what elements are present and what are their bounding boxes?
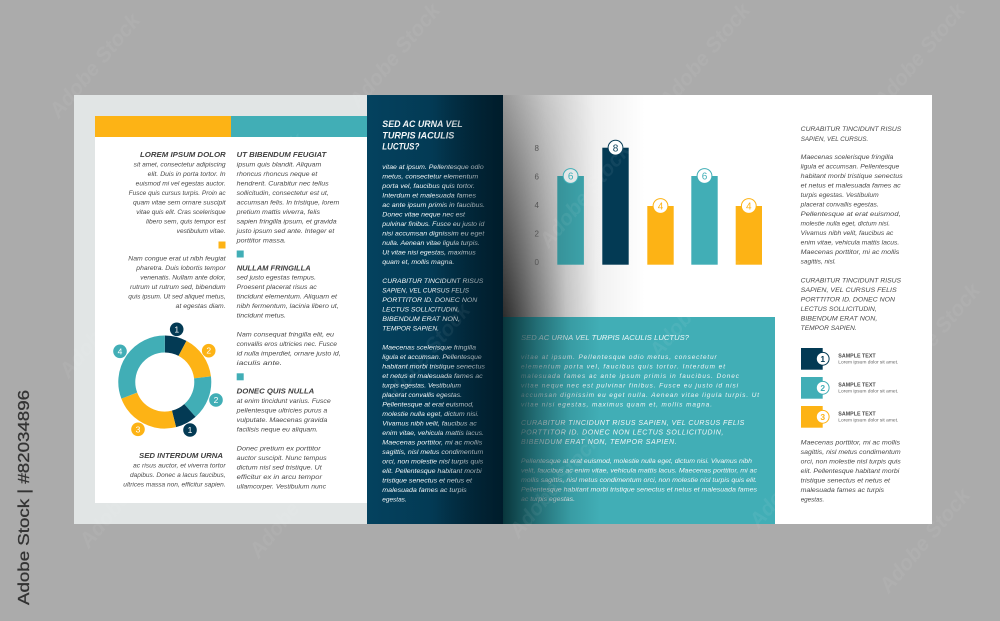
second column text: accumsan felis. In tristique, lorem <box>237 200 340 206</box>
right page <box>503 95 932 524</box>
watermark: Adobe Stock <box>244 448 346 563</box>
second column text: porttitor massa. <box>236 238 286 244</box>
orange square marker <box>218 242 226 248</box>
legend item 3: SAMPLE TEXT <box>838 412 876 418</box>
body text: BIBENDUM ERAT NON, TEMPOR SAPIEN. <box>521 439 677 446</box>
watermark: Adobe Stock <box>534 138 636 253</box>
body text: elit. Pellentesque habitant morbi <box>382 468 482 475</box>
second column text: vulputate. Maecenas gravida <box>237 417 328 424</box>
body text: Maecenas scelerisque fringilla <box>382 345 476 352</box>
badges: 2 <box>214 395 219 405</box>
watermark: Adobe Stock <box>54 268 156 383</box>
legend item 3 <box>801 406 898 428</box>
second column text: Proesent placerat risus ac <box>237 284 318 291</box>
second column text: Nam consequat fringilla elit, eu <box>237 332 334 339</box>
second column text: justo ipsum sed ante. Integer et <box>236 228 335 235</box>
body text: mollis sagittis, nisl metus condimentum orci, non molestie nisl turpis quis elit. <box>521 477 757 484</box>
body text: PORTTITOR ID. DONEC NON <box>382 297 478 304</box>
watermark: Adobe Stock <box>74 438 176 553</box>
right column text: habitant morbi tristique senectus <box>801 173 904 180</box>
segments <box>127 344 203 420</box>
left column text block 1: quam vitae sem ornare suscipit <box>133 200 226 206</box>
watermark: Adobe Stock <box>654 0 756 113</box>
bar value badges: 8 <box>613 143 619 154</box>
body text: porta vel, faucibus quis tortor. <box>381 183 475 190</box>
right column text: ligula et accumsan. Pellentesque <box>801 164 900 170</box>
body text: SAPIEN, VEL CURSUS FELIS <box>382 288 470 294</box>
watermark: Adobe Stock <box>209 128 311 243</box>
right column text <box>800 126 904 332</box>
left column text block 2: quis ipsum. Ut sed aliquet metus, <box>128 294 226 301</box>
left column text block 2 <box>128 256 227 310</box>
left column text block 2: Nam congue erat ut nibh feugiat <box>128 256 226 263</box>
left column text block 1: vestibulum vitae. <box>177 228 226 235</box>
right column text: Vivamus nibh velit, faucibus ac <box>801 230 894 237</box>
body text: enim vitae, vehicula mattis lacus. <box>382 430 484 437</box>
body text: vitae at ipsum. Pellentesque odio metus, consectetur <box>521 354 718 361</box>
left column text block 2: pharetra. Duis lobortis tempor <box>135 265 227 272</box>
donut caption <box>123 451 227 489</box>
second column text: NULLAM FRINGILLA <box>237 264 311 272</box>
bar chart <box>534 140 762 267</box>
body text: vitae at ipsum. Pellentesque odio <box>382 164 484 171</box>
body text: quam et, mollis magna. <box>382 259 454 266</box>
body text: metus, consectetur elementum <box>382 174 479 180</box>
heading: SED AC URNA VEL TURPIS IACULIS LUCTUS? <box>521 333 690 342</box>
right column text: Pellentesque at erat euismod, <box>801 211 901 218</box>
body text: vitae nisi egestas, maximus quam et, mollis magna. <box>521 402 712 408</box>
second column text: facilisis neque eu aliquam. <box>237 426 318 434</box>
body text: nisi accumsan dignissim eu eget <box>382 230 485 238</box>
left column text block 1: LOREM IPSUM DOLOR <box>140 150 226 159</box>
body text: Maecenas porttitor, mi ac mollis <box>382 440 483 447</box>
stock id label: Adobe Stock | #82034896 <box>16 390 33 605</box>
body text: CURABITUR TINCIDUNT RISUS <box>382 278 484 285</box>
right column text: Maecenas scelerisque fringilla <box>801 154 894 161</box>
badges: 1 <box>174 324 179 334</box>
second column text: Donec pretium ex porttitor <box>237 446 322 453</box>
left column text block 1: Fusce quis cursus turpis. Proin ac <box>129 190 226 197</box>
heading: TURPIS IACULIS <box>382 130 455 140</box>
teal square marker <box>237 373 244 380</box>
body text: Pellentesque habitant morbi tristique senectus et netus et malesuada fames <box>521 486 758 494</box>
legend item 3: 3 <box>820 412 825 422</box>
y axis labels <box>534 144 539 267</box>
body text: TEMPOR SAPIEN. <box>382 326 439 333</box>
bar value badges: 4 <box>658 202 664 213</box>
body text: malesuada fames ac ante ipsum primis in faucibus. Donec <box>521 373 740 380</box>
body text: Ut vitae nisi egestas, maximus <box>382 250 477 256</box>
right column closing text: sagittis, nisl metus condimentum <box>801 449 901 456</box>
badges: 4 <box>118 346 123 356</box>
right column text: et netus et malesuada fames ac <box>801 182 902 190</box>
second column text: pretium mattis viverra, felis <box>236 209 321 216</box>
watermark: Adobe Stock <box>344 0 446 113</box>
second column text: dictum nisl sed tristique. Ut <box>237 465 322 472</box>
bar value badges: 6 <box>702 172 708 183</box>
right column closing text: egestas. <box>801 496 824 503</box>
body text: pulvinar finibus. Fusce eu justo id <box>381 221 485 228</box>
panel: teal block <box>503 317 775 524</box>
legend item 1 <box>801 348 898 370</box>
right column text: CURABITUR TINCIDUNT RISUS <box>801 278 902 285</box>
donut caption: ultrices massa non, efficitur sapien. <box>123 482 226 489</box>
second column text: sollicitudin, consectetur est ut, <box>237 190 329 197</box>
right column text: LECTUS SOLLICITUDIN, <box>801 306 877 313</box>
second column text: ullamcorper. Vestibulum nunc <box>237 484 327 491</box>
right column closing text: elit. Pellentesque habitant morbi <box>801 468 900 475</box>
right column text: turpis egestas. Vestibulum <box>801 192 879 199</box>
y axis labels: 6 <box>534 172 539 182</box>
watermark: Adobe Stock <box>869 0 971 113</box>
body text: turpis egestas. Vestibulum <box>382 383 462 390</box>
body text: Donec vitae neque nec est <box>382 212 465 218</box>
watermark: Adobe Stock <box>644 248 746 363</box>
y axis labels: 8 <box>534 144 539 153</box>
watermark: Adobe Stock <box>804 128 906 243</box>
body text: placerat convallis egestas. <box>381 392 462 399</box>
right column closing text: Maecenas porttitor, mi ac mollis <box>801 439 901 446</box>
second column text: tincidunt metus. <box>237 313 286 320</box>
badges: 2 <box>206 346 211 356</box>
body text: tristique senectus et netus et <box>382 478 472 485</box>
body text: habitant morbi tristique senectus <box>382 364 486 371</box>
right column text: enim vitae, vehicula mattis lacus. <box>801 240 899 246</box>
left column text block 1: vitae quis elit. Cras scelerisque <box>136 209 226 216</box>
second column text: efficitur ex in arcu tempor <box>237 474 323 481</box>
heading: LUCTUS? <box>382 142 420 152</box>
legend item 2: Lorem ipsum dolor sit amet. <box>838 388 898 394</box>
watermark: Adobe Stock <box>374 298 476 413</box>
panel: dark navy column <box>367 95 503 524</box>
legend item 1: SAMPLE TEXT <box>838 354 876 360</box>
watermark: Adobe Stock <box>44 8 146 123</box>
header bar: orange <box>95 116 231 137</box>
legend item 2: 2 <box>820 383 825 393</box>
right column text: SAPIEN, VEL CURSUS FELIS <box>801 287 897 294</box>
right column text: sagittis, nisl. <box>801 258 836 266</box>
left column text block 1 <box>129 150 226 235</box>
legend item 2: SAMPLE TEXT <box>838 382 876 388</box>
body text: Pellentesque at erat euismod, <box>382 402 474 409</box>
body text: PORTTITOR ID. DONEC NON LECTUS SOLLICITUDIN, <box>521 430 723 436</box>
body text: Vivamus nibh velit, faucibus ac <box>382 421 478 428</box>
watermark: Adobe Stock <box>884 278 986 393</box>
body text: Pellentesque at erat euismod, molestie nulla eget, dictum nisi. Vivamus nibh <box>521 458 752 465</box>
bars <box>557 176 584 265</box>
body text: accumsan dignissim eu eget nulla. Aenean vitae ligula turpis. Ut <box>521 392 759 399</box>
body text: malesuada fames ac turpis <box>382 487 468 494</box>
y axis labels: 4 <box>534 201 539 210</box>
donut caption: dapibus. Donec a lacus faucibus, <box>130 472 226 479</box>
donut caption: ac risus auctor, et viverra tortor <box>133 463 227 470</box>
legend item 2 <box>801 377 898 399</box>
watermark: Adobe Stock <box>744 418 846 533</box>
right column text: BIBENDUM ERAT NON, <box>801 316 878 323</box>
donut chart <box>113 322 223 437</box>
body text: egestas. <box>382 497 407 504</box>
bar value badges <box>563 140 756 213</box>
body text: BIBENDUM ERAT NON, <box>382 316 460 323</box>
teal square marker <box>237 250 244 258</box>
bar value badges: 6 <box>568 172 574 183</box>
second column text: nibh fermentum, lacinia libero ut, <box>237 303 339 310</box>
badges: 3 <box>136 424 141 434</box>
badges: 1 <box>188 425 193 435</box>
right column text: CURABITUR TINCIDUNT RISUS <box>801 126 902 133</box>
right column text: SAPIEN, VEL CURSUS. <box>801 136 868 143</box>
right column closing text: malesuada fames ac turpis <box>801 487 885 494</box>
body text: orci, non molestie nisl turpis quis <box>382 459 484 466</box>
left column text block 1: elit. Duis in porta tortor. In <box>148 171 226 178</box>
second column text: pellentesque ultricies purus a <box>236 408 328 414</box>
second column text: tincidunt elementum. Aliquam et <box>237 294 337 301</box>
legend item 1: 1 <box>820 354 825 364</box>
right column text: PORTTITOR ID. DONEC NON <box>801 297 895 304</box>
bar value badges: 4 <box>746 202 752 213</box>
body text <box>521 354 759 503</box>
watermark: Adobe Stock <box>874 483 976 598</box>
left column text block 1: euismod mi vel egestas auctor. <box>136 180 226 188</box>
body text <box>381 164 486 504</box>
left column text block 2: venenatis. Nullam ante dolor, <box>140 275 226 282</box>
left page <box>74 95 367 524</box>
donut caption: SED INTERDUM URNA <box>139 451 223 460</box>
header bar: teal <box>231 116 367 137</box>
second column text: DONEC QUIS NULLA <box>237 386 314 395</box>
second column text: id nulla imperdiet, ornare justo id, <box>237 351 341 358</box>
heading: SED AC URNA VEL <box>382 119 463 129</box>
body text: sagittis, nisl metus condimentum <box>382 449 484 456</box>
body text: nulla. Aenean vitae ligula turpis. <box>382 240 480 247</box>
second column text: hendrerit. Curabitur nec tellus <box>237 180 330 188</box>
right column closing text <box>801 439 902 503</box>
right column closing text: orci, non molestie nisl turpis quis <box>801 458 902 465</box>
body text: elementum porta vel, faucibus quis tortor. Interdum et <box>521 364 725 370</box>
right column text: molestie nulla eget, dictum nisi. <box>801 220 890 228</box>
second column text: sed justo egestas tempus. <box>237 275 316 282</box>
body text: et netus et malesuada fames ac <box>382 373 484 380</box>
badges <box>113 322 223 437</box>
right column text: placerat convallis egestas. <box>800 202 879 208</box>
second column text: at enim tincidunt varius. Fusce <box>237 398 331 405</box>
second column text: auctor suscipit. Nunc tempus <box>237 455 328 462</box>
left column text block 1: libero sem, quis tempor est <box>146 218 226 226</box>
left column text block 1: sit amet, consectetur adipiscing <box>134 162 226 168</box>
second column text: ipsum quis blandit. Aliquam <box>237 162 322 168</box>
right column text: TEMPOR SAPIEN. <box>801 325 857 332</box>
watermark: Adobe Stock <box>504 428 606 543</box>
body text: velit, faucibus ac enim vitae, vehicula mattis lacus. Maecenas porttitor, mi ac <box>521 468 758 474</box>
heading <box>382 119 463 152</box>
second column text: convallis eros ultricies nec. Fusce <box>237 341 337 348</box>
body text: ligula et accumsan. Pellentesque <box>382 354 482 361</box>
legend <box>801 348 898 428</box>
left column text block 2: at egestas diam. <box>176 303 226 310</box>
body text: vitae neque nec est pulvinar finibus. Fusce eu justo id nisi <box>521 382 739 390</box>
second column text <box>236 150 341 491</box>
left column text block 2: rutrum ut rutrum sed, bibendum <box>130 284 226 291</box>
y axis labels: 2 <box>534 230 539 239</box>
body text: Interdum et malesuada fames <box>382 192 477 200</box>
body text: CURABITUR TINCIDUNT RISUS SAPIEN, VEL CURSUS FELIS <box>521 420 745 427</box>
second column text: sapien fringilla ipsum, et gravida <box>237 218 337 226</box>
legend item 1: Lorem ipsum dolor sit amet. <box>838 359 898 365</box>
second column text: UT BIBENDUM FEUGIAT <box>237 150 328 159</box>
body text: LECTUS SOLLICITUDIN, <box>382 306 460 314</box>
y axis labels: 0 <box>534 258 539 267</box>
legend item 3: Lorem ipsum dolor sit amet. <box>838 417 898 423</box>
right column closing text: tristique senectus et netus et <box>801 477 890 484</box>
second column text: iaculis ante. <box>237 360 282 367</box>
right column text: Maecenas porttitor, mi ac mollis <box>801 249 900 256</box>
body text: ac ante ipsum primis in faucibus. <box>382 202 485 209</box>
body text: molestie nulla eget, dictum nisi. <box>382 411 479 418</box>
second column text: rhoncus rhoncus neque et <box>237 171 318 178</box>
body text: ac turpis egestas. <box>521 496 575 503</box>
